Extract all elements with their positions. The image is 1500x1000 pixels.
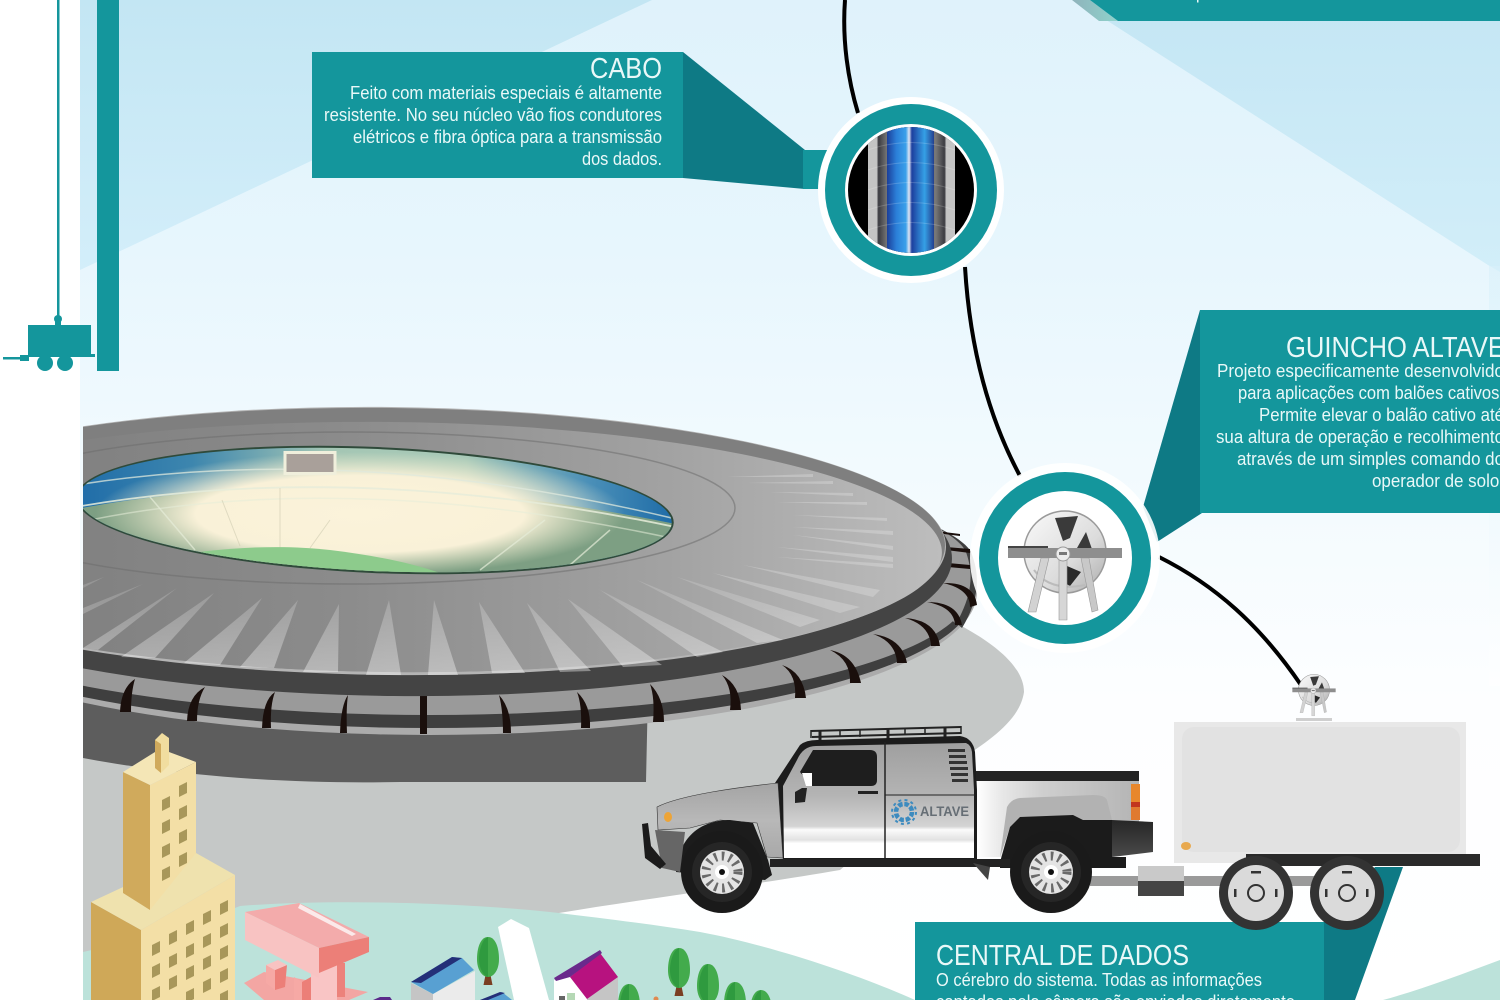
panel fold [1324,867,1403,1000]
cargo bed rail [976,771,1139,781]
building: gas station [244,903,369,1000]
stadium roof [83,406,946,676]
heading: CABO [590,53,662,85]
tail light [1131,784,1140,820]
icon: cable cross-section [818,97,1004,283]
pillar [337,963,345,997]
sill [770,859,1010,880]
description: resistente. No seu núcleo vão fios condutores [324,105,662,125]
cargo bed body [977,781,1139,857]
scoreboard [285,452,335,474]
station base [244,972,368,1000]
canopy side [319,937,369,973]
stadium [0,401,977,782]
trees [477,937,772,1000]
front grille and bumper [642,812,685,872]
rear wheel arch [1000,815,1126,868]
truck [642,726,1153,913]
canopy top [245,903,369,948]
sky shard upper left [80,0,652,270]
side vent [948,749,968,782]
description [1216,361,1500,491]
icon: winch circle [970,463,1160,653]
trailer [1090,674,1480,930]
ground: grey stadium plaza [83,620,1024,1000]
stadium base [83,702,648,782]
window [800,750,877,786]
ground: mint park [83,902,915,1000]
description: dos dados. [582,149,662,169]
tower spire [155,733,169,773]
roof rays [83,474,893,675]
building: purple roof [373,997,392,1000]
top callout panel fragment [1072,0,1500,21]
building: second blue roof [480,992,512,1000]
pump one [266,960,287,990]
sky edge strip right [1489,266,1500,686]
panel fold [1143,310,1202,542]
black cable [844,0,1301,685]
description [936,970,1295,1000]
sky shard upper right [1075,0,1500,272]
door handle [858,791,878,794]
cab and door panels [783,743,974,858]
description: elétricos e fibra óptica para a transmissão [353,127,662,147]
canopy front [245,912,319,978]
building: tall tower [91,733,235,1000]
panel body [1200,310,1500,513]
trailer wheels [1219,856,1384,930]
tower windows [152,782,228,1000]
logo altave: ALTAVE [920,803,969,819]
ring ribs [120,531,977,734]
description: O cérebro do sistema. Todas as informações [936,970,1262,990]
panel fold [683,52,805,189]
pump two [294,977,311,1000]
heading: CENTRAL DE DADOS [936,940,1189,972]
hitch [1138,866,1184,896]
cab shell [775,736,977,860]
rear wall [311,960,337,1000]
building: magenta house [554,950,618,1000]
ground: mint corner [1383,960,1500,1000]
description: Feito com materiais especiais é altamente [350,83,662,103]
panel body [915,922,1324,1000]
hood [657,783,783,858]
connector tab [803,150,827,189]
panel body [312,52,683,178]
trailer box [1174,722,1466,863]
description [324,83,662,169]
panel: central de dados [915,867,1403,1000]
building: blue house [411,957,475,1000]
tower lower block [91,902,141,1000]
stadium roof rim [83,533,952,696]
panel: cabo [312,52,827,189]
logo altave [892,800,969,824]
tower upper block [123,772,150,910]
rear bumper [1112,820,1153,857]
front wheel arch [676,820,772,880]
roof rack [811,726,961,745]
truck wheels [681,831,1092,913]
rear fender [1000,795,1112,857]
stadium outer ring [83,529,977,735]
icon: miniature winch trailer silhouette [3,0,119,371]
inner roof ring line [0,432,735,584]
trailer deck [1246,854,1480,866]
stadium opening [83,446,674,574]
icon: small winch on trailer [1292,674,1336,721]
panel: guincho altave [1143,310,1500,542]
tow bar [1090,876,1320,886]
monument: white obelisk [498,919,549,1000]
mirror [795,773,812,803]
door lines [885,742,975,858]
